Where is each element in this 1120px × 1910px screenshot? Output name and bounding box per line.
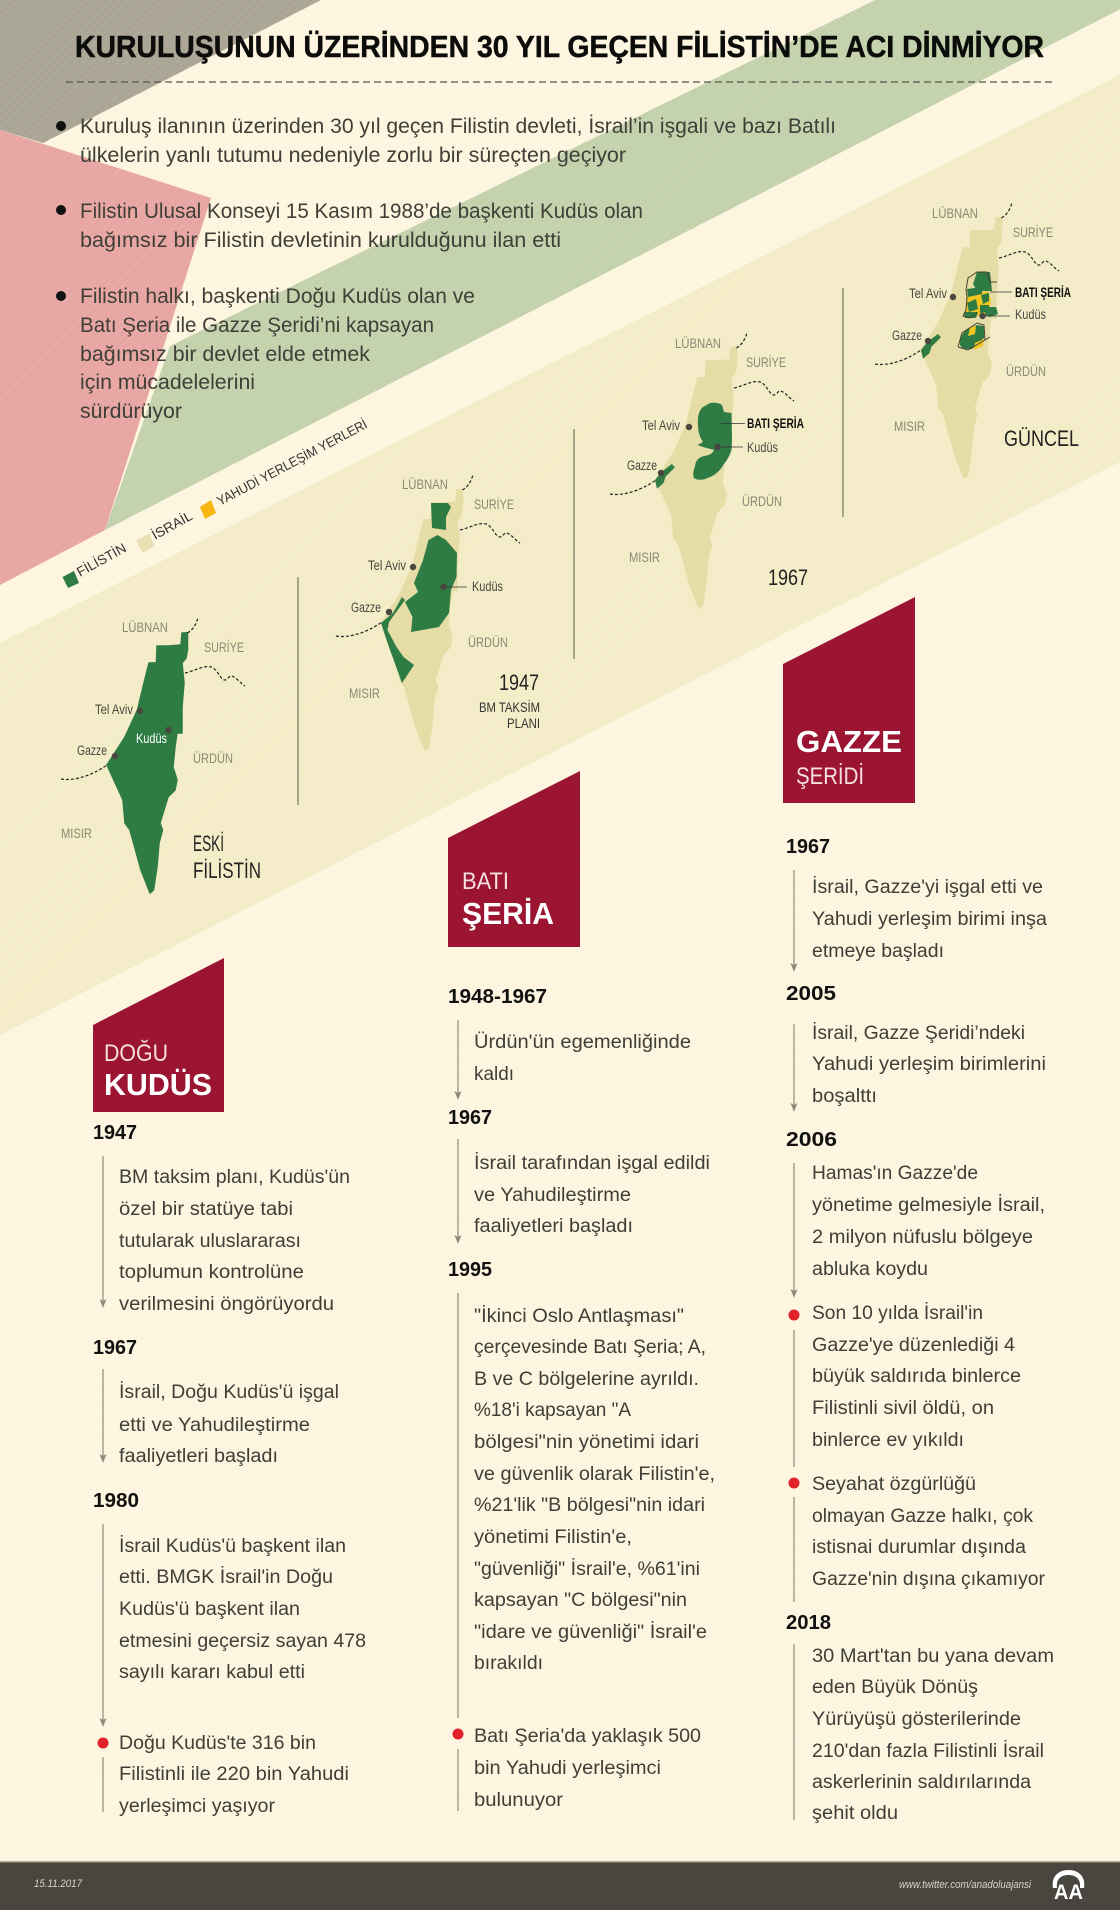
note: seyahat (788, 1474, 1046, 1602)
note: yerleşimci: Batı Şeria'da yaklaşık 500 (474, 1726, 701, 1747)
timeline 1947: 1947 (93, 1122, 137, 1144)
map: güncel: Gazze (892, 328, 922, 343)
timeline 2006: Hamas'ın Gazze'de (812, 1163, 978, 1184)
legend: FİLİSTİN (74, 540, 129, 580)
heading: Gazze Şeridi (783, 597, 915, 803)
map: 1947 (336, 475, 540, 750)
map: 1967: LÜBNAN (675, 336, 721, 351)
note: saldırılar: Gazze'ye düzenlediği 4 (812, 1335, 1015, 1356)
map: 1967: BATI ŞERİA (747, 416, 804, 431)
timeline 1967: faaliyetleri başladı (119, 1446, 278, 1467)
heading: Gazze Şeridi: ŞERİDİ (796, 763, 864, 790)
map: 1967: SURİYE (746, 355, 786, 370)
timeline 2018: 210'dan fazla Filistinli İsrail (812, 1741, 1044, 1762)
timeline 1947: özel bir statüye tabi (119, 1199, 293, 1220)
timeline 1948-1967 (448, 986, 691, 1100)
map: güncel: Kudüs (1015, 307, 1046, 322)
bullet 2 (56, 200, 643, 252)
note: yerleşimci: bulunuyor (474, 1790, 564, 1811)
bullet 3: Batı Şeria ile Gazze Şeridi’ni kapsayan (80, 314, 434, 337)
timeline 1947: toplumun kontrolüne (119, 1262, 304, 1283)
map: eski Filistin: MISIR (61, 826, 92, 841)
map: güncel: Tel Aviv (909, 286, 947, 301)
timeline 2006: 2006 (786, 1129, 837, 1151)
timeline 1980: İsrail Kudüs'ü başkent ilan (119, 1536, 346, 1557)
timeline 1980: etmesini geçersiz sayan 478 (119, 1631, 366, 1652)
timeline 2018: eden Büyük Dönüş (812, 1677, 978, 1698)
timeline 2005: 2005 (786, 983, 836, 1005)
timeline 1967: etmeye başladı (812, 941, 944, 962)
timeline 1995: %18'i kapsayan "A (474, 1400, 631, 1421)
map: 1947: Gazze (351, 600, 381, 615)
note: saldırılar (788, 1303, 1021, 1467)
source url: www.twitter.com/anadoluajansi (899, 1879, 1031, 1891)
timeline 1995: B ve C bölgelerine ayrıldı. (474, 1369, 699, 1390)
timeline 1967: İsrail, Gazze'yi işgal etti ve (812, 877, 1043, 898)
bullet 2: Filistin Ulusal Konseyi 15 Kasım 1988’de başkenti Kudüs olan (80, 200, 643, 223)
map: eski Filistin: ESKİ (193, 831, 224, 856)
map: güncel (875, 203, 1079, 478)
map: eski Filistin: Kudüs (136, 731, 167, 746)
map: eski Filistin (61, 618, 261, 893)
map: 1967: MISIR (629, 550, 660, 565)
timeline 1947 (93, 1122, 350, 1315)
heading: Batı Şeria: BATI (462, 868, 509, 895)
heading: Batı Şeria: ŞERİA (462, 896, 554, 931)
map: eski Filistin: LÜBNAN (122, 620, 168, 635)
timeline 1995: "güvenliği" İsrail'e, %61'ini (474, 1559, 700, 1580)
bullet 1: Kuruluş ilanının üzerinden 30 yıl geçen Filistin devleti, İsrail’in işgali ve bazı Batılı (80, 115, 836, 138)
timeline 1980: etti. BMGK İsrail'in Doğu (119, 1567, 333, 1588)
note: nüfus: Filistinli ile 220 bin Yahudi (119, 1764, 349, 1785)
map: 1967: Gazze (627, 458, 657, 473)
note: yerleşimci: bin Yahudi yerleşimci (474, 1758, 661, 1779)
map: eski Filistin: SURİYE (204, 640, 244, 655)
map: 1967: Tel Aviv (642, 418, 680, 433)
timeline 1980: sayılı kararı kabul etti (119, 1662, 305, 1683)
note: saldırılar: Son 10 yılda İsrail'in (812, 1303, 983, 1324)
map: güncel: MISIR (894, 419, 925, 434)
timeline 1967: Yahudi yerleşim birimi inşa (812, 909, 1047, 930)
map: 1947: 1947 (499, 670, 539, 695)
legend: İSRAİL (149, 508, 195, 543)
footer (0, 1861, 1120, 1910)
timeline 1995: "İkinci Oslo Antlaşması" (474, 1306, 684, 1327)
timeline 1980: 1980 (93, 1490, 139, 1512)
map: eski Filistin: ÜRDÜN (193, 751, 233, 766)
timeline 2018: 30 Mart'tan bu yana devam (812, 1646, 1054, 1667)
note: nüfus: Doğu Kudüs'te 316 bin (119, 1733, 316, 1754)
map: 1947: SURİYE (474, 497, 514, 512)
panel: Gazze Şeridi (783, 597, 1054, 1824)
timeline 2005 (786, 983, 1046, 1112)
map: güncel: BATI ŞERİA (1015, 285, 1071, 300)
timeline 1995: bırakıldı (474, 1653, 543, 1674)
timeline 1967: İsrail tarafından işgal edildi (474, 1153, 710, 1174)
divider (573, 429, 575, 659)
note: yerleşimci (452, 1726, 701, 1811)
map: 1947: BM TAKSİM (479, 698, 540, 715)
icon: AA logo: AA (1054, 1881, 1083, 1904)
map: 1947: PLANI (507, 715, 540, 731)
heading: Doğu Kudüs: KUDÜS (104, 1067, 212, 1102)
bullet 3: sürdürüyor (80, 400, 182, 423)
timeline 1995: çerçevesinde Batı Şeria; A, (474, 1337, 706, 1358)
heading: Batı Şeria (448, 771, 580, 947)
map: 1947: ÜRDÜN (468, 635, 508, 650)
timeline 2018: askerlerinin saldırılarında (812, 1772, 1031, 1793)
title divider (66, 81, 1054, 83)
timeline 1995: "idare ve güvenliği" İsrail'e (474, 1622, 707, 1643)
map: eski Filistin: FİLİSTİN (193, 858, 261, 883)
map: 1947: Kudüs (472, 579, 503, 594)
timeline 2018 (786, 1612, 1054, 1824)
timeline 1995: yönetimi Filistin'e, (474, 1527, 632, 1548)
legend: YAHUDİ YERLEŞİM YERLERİ (214, 417, 370, 509)
timeline 2005: Yahudi yerleşim birimlerini (812, 1054, 1046, 1075)
timeline 1995 (448, 1259, 715, 1718)
note: seyahat: Gazze'nin dışına çıkamıyor (812, 1569, 1046, 1590)
timeline 2005: İsrail, Gazze Şeridi’ndeki (812, 1023, 1025, 1044)
timeline 1967: etti ve Yahudileştirme (119, 1415, 310, 1436)
timeline 1947: verilmesini öngörüyordu (119, 1294, 334, 1315)
panel: Batı Şeria (448, 771, 715, 1811)
bullet 3 (56, 285, 475, 423)
note: seyahat: Seyahat özgürlüğü (812, 1474, 976, 1495)
note: seyahat: istisnai durumlar dışında (812, 1537, 1026, 1558)
timeline 2006: abluka koydu (812, 1259, 928, 1280)
timeline 2018: 2018 (786, 1612, 831, 1634)
bullet 3: bağımsız bir devlet elde etmek (80, 343, 370, 366)
timeline 1947: tutularak uluslararası (119, 1231, 301, 1252)
timeline 1967: İsrail, Doğu Kudüs'ü işgal (119, 1382, 339, 1403)
icon: AA logo (1053, 1870, 1084, 1904)
legend (62, 417, 370, 588)
map: 1947: MISIR (349, 686, 380, 701)
timeline 2005: boşalttı (812, 1086, 877, 1107)
map: 1947: LÜBNAN (402, 477, 448, 492)
heading: Doğu Kudüs (93, 958, 224, 1112)
map: güncel: SURİYE (1013, 225, 1053, 240)
timeline 1995: 1995 (448, 1259, 492, 1281)
timeline 2006 (786, 1129, 1045, 1298)
timeline 1967: ve Yahudileştirme (474, 1185, 631, 1206)
map: 1947: Tel Aviv (368, 558, 406, 573)
timeline 2006: yönetime gelmesiyle İsrail, (812, 1195, 1045, 1216)
intro bullets (56, 115, 836, 423)
timeline 1967: faaliyetleri başladı (474, 1216, 633, 1237)
map: eski Filistin: Gazze (77, 743, 107, 758)
panel: Doğu Kudüs (93, 958, 366, 1817)
timeline 1995: %21'lik "B bölgesi"nin idari (474, 1495, 705, 1516)
map: güncel: ÜRDÜN (1006, 364, 1046, 379)
map: eski Filistin: Tel Aviv (95, 702, 133, 717)
timeline 1995: bölgesi"nin yönetimi idari (474, 1432, 699, 1453)
timeline 1980 (93, 1490, 366, 1727)
timeline 1948-1967: Ürdün'ün egemenliğinde (474, 1032, 691, 1053)
timeline 2018: şehit oldu (812, 1803, 898, 1824)
divider (297, 577, 299, 805)
note: nüfus (98, 1733, 349, 1817)
timeline 1948-1967: kaldı (474, 1064, 514, 1085)
timeline 1967: 1967 (93, 1337, 137, 1359)
map: 1967 (610, 333, 808, 608)
divider (842, 288, 844, 517)
map: güncel: GÜNCEL (1004, 426, 1079, 451)
title: KURULUŞUNUN ÜZERİNDEN 30 YIL GEÇEN FİLİSTİN’DE ACI DİNMİYOR (75, 29, 1044, 64)
date: 15.11.2017 (34, 1878, 83, 1890)
bullet 3: Filistin halkı, başkenti Doğu Kudüs olan ve (80, 285, 475, 308)
note: nüfus: yerleşimci yaşıyor (119, 1796, 276, 1817)
timeline 1980: Kudüs'ü başkent ilan (119, 1599, 300, 1620)
map: güncel: LÜBNAN (932, 206, 978, 221)
bullet 1 (56, 115, 836, 167)
timeline 1995: ve güvenlik olarak Filistin'e, (474, 1464, 715, 1485)
timeline 2006: 2 milyon nüfuslu bölgeye (812, 1227, 1033, 1248)
timeline 2018: Yürüyüşü gösterilerinde (812, 1709, 1021, 1730)
map: 1967: ÜRDÜN (742, 494, 782, 509)
timeline 1995: kapsayan "C bölgesi"nin (474, 1590, 687, 1611)
bullet 2: bağımsız bir Filistin devletinin kurulduğunu ilan etti (80, 229, 561, 252)
bullet 3: için mücadelelerini (80, 371, 255, 394)
timeline 1967: 1967 (786, 836, 830, 858)
note: saldırılar: büyük saldırıda binlerce (812, 1366, 1021, 1387)
timeline 1948-1967: 1948-1967 (448, 986, 547, 1008)
timeline 1967: 1967 (448, 1107, 492, 1129)
bullet 1: ülkelerin yanlı tutumu nedeniyle zorlu bir süreçten geçiyor (80, 144, 626, 167)
map: 1967: 1967 (768, 565, 808, 590)
heading: Doğu Kudüs: DOĞU (104, 1040, 168, 1067)
heading: Gazze Şeridi: GAZZE (796, 724, 902, 759)
timeline 1967 (448, 1107, 710, 1244)
timeline 1967 (786, 836, 1047, 972)
map: 1967: Kudüs (747, 440, 778, 455)
note: saldırılar: binlerce ev yıkıldı (812, 1430, 964, 1451)
note: seyahat: olmayan Gazze halkı, çok (812, 1506, 1034, 1527)
timeline 1947: BM taksim planı, Kudüs'ün (119, 1167, 350, 1188)
note: saldırılar: Filistinli sivil öldü, on (812, 1398, 994, 1419)
timeline 1967 (93, 1337, 339, 1467)
